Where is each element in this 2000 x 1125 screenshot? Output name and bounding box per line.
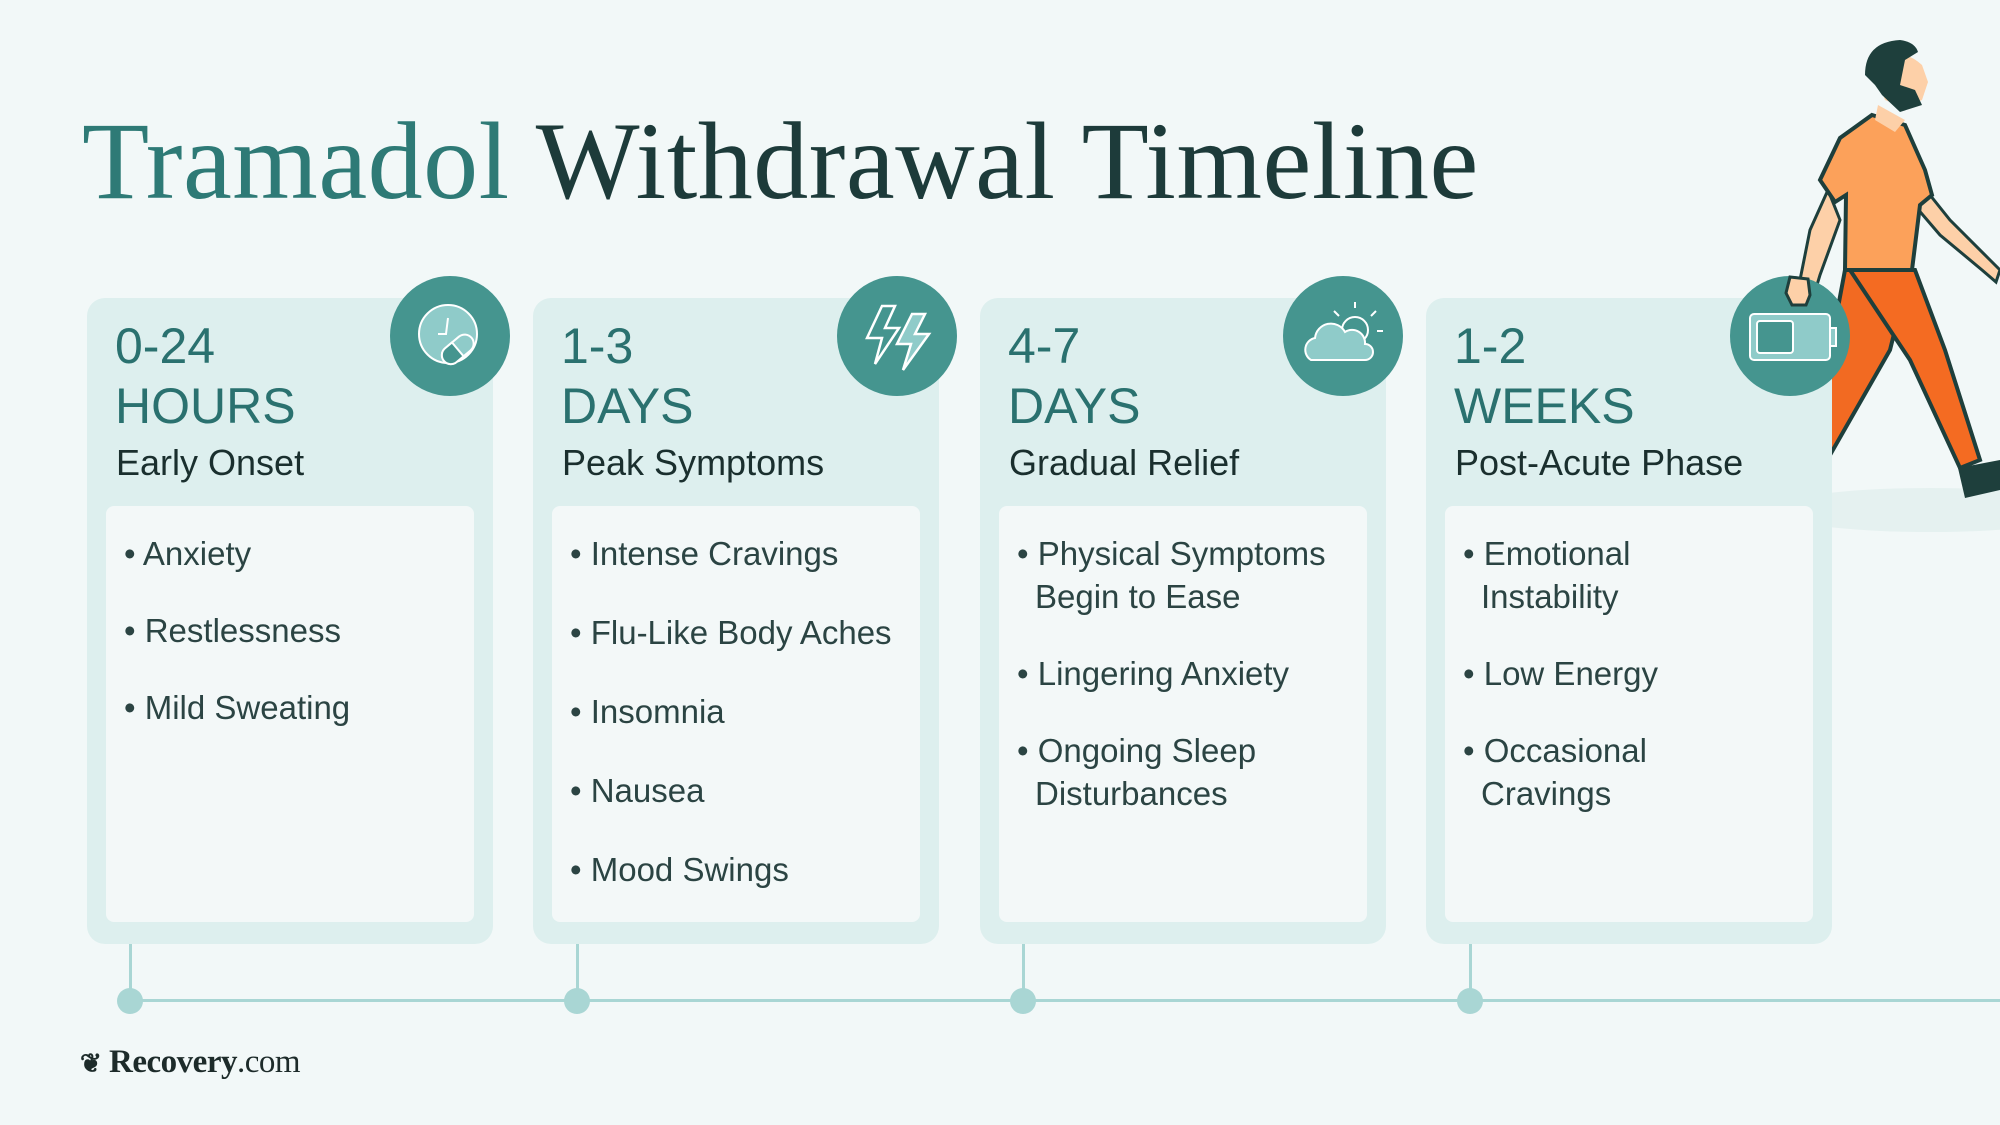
panel: 1-3 days: DAYS <box>561 378 693 434</box>
panel: 0-24 hours: Early Onset <box>116 442 304 483</box>
panel: 1-2 weeks: Post-Acute Phase <box>1455 442 1743 483</box>
panel: 1-2 weeks: • Low Energy <box>1463 655 1658 692</box>
panel: 1-3 days: Peak Symptoms <box>562 442 824 483</box>
panel: 4-7 days: • Physical Symptoms Begin to Ease <box>1017 535 1326 615</box>
timeline line <box>130 999 2000 1002</box>
panel: 4-7 days: • Lingering Anxiety <box>1017 655 1289 692</box>
icon: battery <box>1730 276 1850 396</box>
panel: 0-24 hours <box>87 298 493 944</box>
panel: 4-7 days: Gradual Relief <box>1009 442 1239 483</box>
panel: 1-2 weeks: Instability <box>1481 578 1619 615</box>
panel: 1-2 weeks: Cravings <box>1481 775 1611 812</box>
icon: cloud and sun <box>1283 276 1403 396</box>
panel: 1-2 weeks: • Occasional <box>1463 732 1647 769</box>
panel: 1-3 days: • Nausea <box>570 772 704 809</box>
icon: lightning <box>837 276 957 396</box>
panel: 1-2 weeks <box>1426 298 1832 944</box>
panel: 1-3 days: • Mood Swings <box>570 851 789 888</box>
panel: 4-7 days: • Ongoing Sleep Disturbances <box>1017 732 1256 812</box>
panel: 1-3 days: • Flu-Like Body Aches <box>570 614 892 651</box>
icon: clock and pill <box>390 276 510 396</box>
panel: 1-3 days: 1-3 <box>561 318 633 374</box>
panel: 1-3 days <box>533 298 939 944</box>
man's hand over icon <box>1784 275 1812 306</box>
panel: 4-7 days: 4-7 <box>1008 318 1080 374</box>
title: Tramadol Withdrawal Timeline <box>82 100 1479 222</box>
panel: 1-2 weeks: WEEKS <box>1454 378 1635 434</box>
panel: 1-3 days: • Intense Cravings <box>570 535 838 572</box>
panel: 0-24 hours: 0-24 <box>115 318 215 374</box>
panel: 1-3 days: • Insomnia <box>570 693 725 730</box>
panel: 4-7 days <box>980 298 1386 944</box>
panel: 4-7 days: DAYS <box>1008 378 1140 434</box>
panel: 1-2 weeks: 1-2 <box>1454 318 1526 374</box>
panel: 0-24 hours: • Mild Sweating <box>124 689 350 726</box>
panel: 1-2 weeks: • Emotional <box>1463 535 1630 572</box>
panel: 0-24 hours: • Restlessness <box>124 612 341 649</box>
logo: ❦ Recovery.com <box>80 1044 300 1080</box>
timeline markers <box>117 944 1483 1014</box>
panel: 0-24 hours: • Anxiety <box>124 535 251 572</box>
illustration: walking man <box>1799 40 2000 532</box>
panel: 0-24 hours: HOURS <box>115 378 296 434</box>
